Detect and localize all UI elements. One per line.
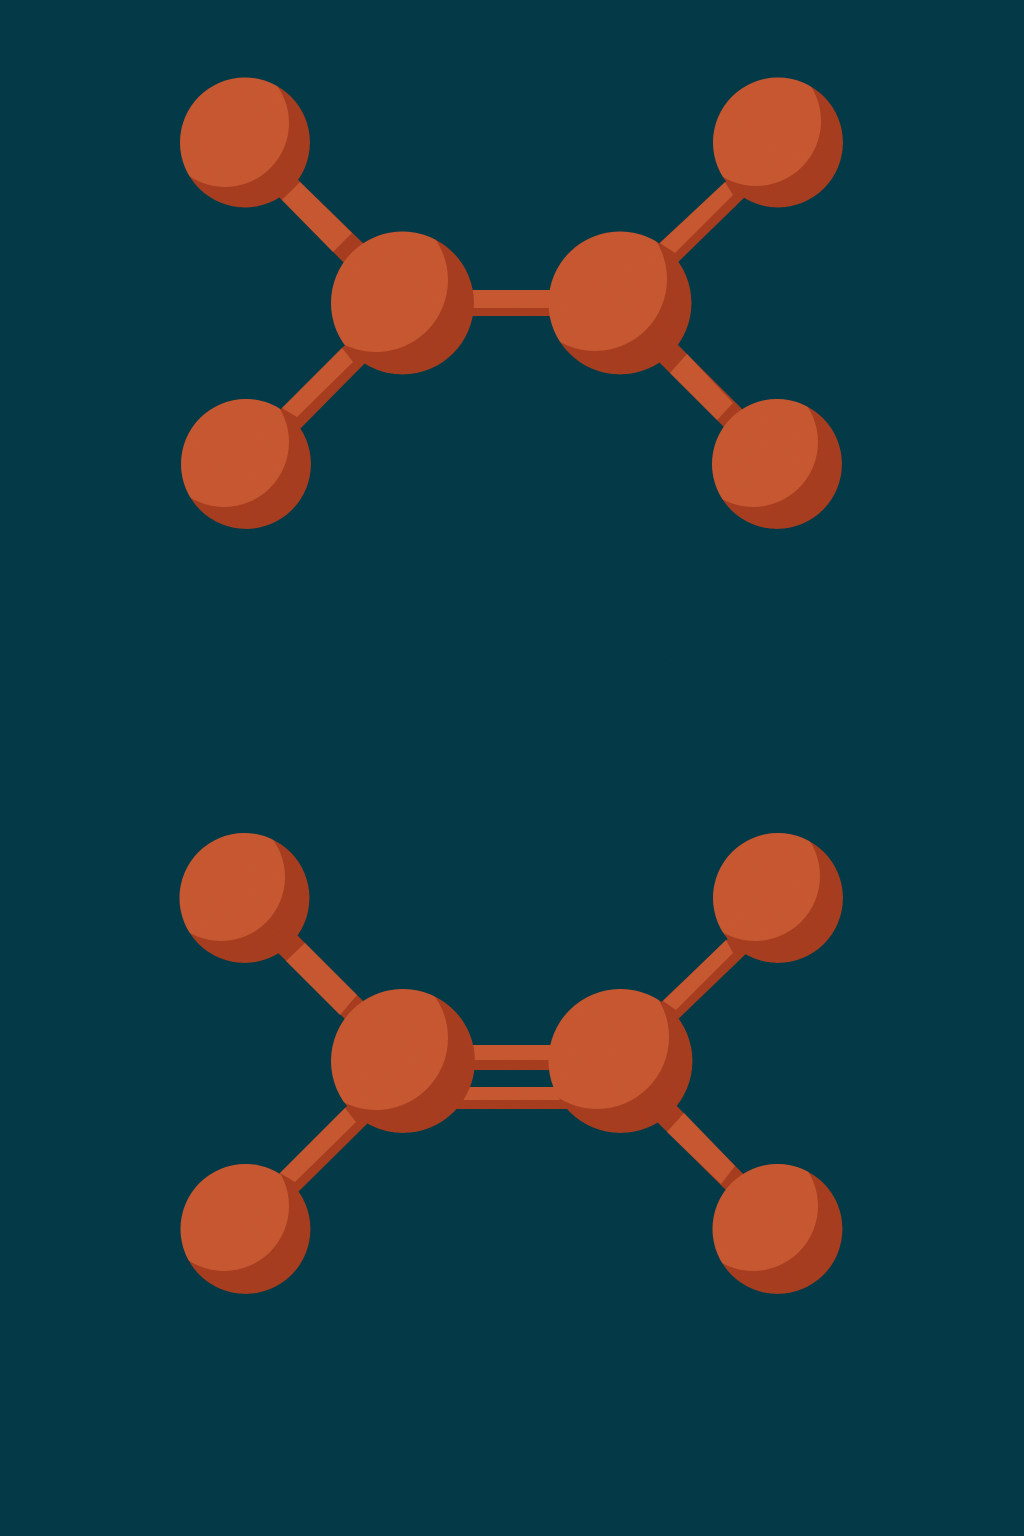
atom: bottom-left <box>180 1164 310 1294</box>
atom: centre-right <box>548 989 692 1133</box>
bond: central double bond, lower bar <box>450 1087 575 1109</box>
bond: top-left diagonal <box>270 928 370 1026</box>
atom: top-right <box>713 833 843 963</box>
atom: bottom-right <box>712 399 842 529</box>
bond: bottom-left diagonal <box>272 1100 375 1198</box>
bond: central double bond, upper bar <box>460 1045 560 1070</box>
atom: bottom-left <box>181 399 311 529</box>
bond: top-left diagonal <box>272 172 370 270</box>
top molecule: single bond <box>159 56 843 529</box>
bond: bottom-left diagonal <box>274 340 373 435</box>
bond: bottom-right diagonal <box>650 1099 750 1197</box>
bond: top-right diagonal <box>652 175 751 269</box>
atom: top-right <box>713 78 843 208</box>
bond: central single bond <box>460 290 560 316</box>
atom: centre-left <box>331 232 474 374</box>
atom: centre-left <box>331 989 475 1133</box>
bond: top-right diagonal <box>655 933 753 1025</box>
infographic canvas <box>180 78 843 1294</box>
bottom molecule: double bond <box>157 811 843 1294</box>
atom: centre-right <box>548 232 692 374</box>
atom: top-left <box>180 833 310 963</box>
bond: bottom-right diagonal <box>653 339 752 436</box>
atom: top-left <box>180 78 310 208</box>
atom: bottom-right <box>712 1164 842 1294</box>
